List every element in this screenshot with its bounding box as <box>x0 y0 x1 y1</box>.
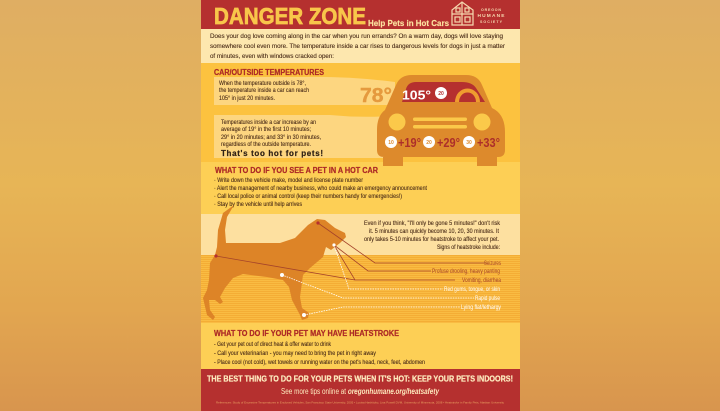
callout: too hot: That's too hot for pets! <box>221 149 323 158</box>
panel: car temperatures <box>214 67 505 166</box>
stat: +19: +19° <box>398 136 421 150</box>
logo: name <box>478 8 505 24</box>
panel: what to do if you see a pet in a hot car <box>214 165 427 208</box>
stat: 78 degrees: 78° <box>360 85 392 107</box>
stat: +33: +33° <box>477 136 500 150</box>
text block 1 <box>219 79 309 102</box>
footer link: See more tips online at oregonhumane.org/heatsafety <box>281 387 439 396</box>
stat: +33: 30 <box>466 140 472 146</box>
text block: Even if you think, "I'll only be gone 5 minutes!" don't risk <box>364 220 501 227</box>
panel: what to do if pet has heatstroke: - Get your pet out of direct heat & offer water to drink <box>214 341 332 348</box>
logo: house <box>452 2 473 25</box>
footer banner <box>201 369 520 411</box>
text block 2 <box>221 119 321 148</box>
sign labels: Vomiting, diarrhea <box>462 278 502 284</box>
text block 2: average of 19° in the first 10 minutes; <box>221 125 311 133</box>
callout band 1 <box>214 77 395 105</box>
intro text: Does your dog love coming along in the car when you run errands? On a warm day, dogs will love staying <box>210 33 503 40</box>
stat: 105 degrees: 105° <box>402 88 431 102</box>
text block: Signs of heatstroke include: <box>437 244 500 251</box>
sign labels: Profuse drooling, heavy panting <box>432 269 500 275</box>
panel: what to do if pet has heatstroke: - Call your veterinarian - you may need to bring the pet in right away <box>214 350 377 357</box>
stat: +33 <box>463 136 500 150</box>
heading: CAR/OUTSIDE TEMPERATURES <box>214 67 324 77</box>
footer headline: THE BEST THING TO DO FOR YOUR PETS WHEN IT'S HOT: KEEP YOUR PETS INDOORS! <box>207 374 513 384</box>
text block: it. 5 minutes can quickly become 10, 20, 30 minutes. It <box>369 228 499 235</box>
icon: car <box>377 75 505 166</box>
panel: what to do if pet has heatstroke <box>214 328 425 366</box>
logo: name: SOCIETY <box>480 20 503 24</box>
panel: what to do if pet has heatstroke: WHAT TO DO IF YOUR PET MAY HAVE HEATSTROKE <box>214 328 399 338</box>
logo: name: HUMANE <box>478 13 505 19</box>
text block 2: regardless of the outside temperature. <box>221 141 311 148</box>
sign lines <box>216 223 487 315</box>
illustration: dog <box>203 205 346 320</box>
references: References: Study of Excessive Temperatures in Enclosed Vehicles, San Francisco State University, 2005 • Louisa Hashitoko, Lisa Powell DVM, University of Minnesota, 2008 • Heatstroke in Family Pets, Alaskan University <box>216 400 504 404</box>
panel: what to do if you see a pet in a hot car: · Alert the management of nearby business, who could make an emergency announcement <box>214 185 427 192</box>
panel: what to do if you see a pet in a hot car: WHAT TO DO IF YOU SEE A PET IN A HOT CAR <box>215 165 379 175</box>
subtitle: Help Pets in Hot Cars <box>368 18 449 28</box>
markers <box>214 221 336 317</box>
intro text <box>201 29 520 63</box>
callout band 2 <box>214 115 390 158</box>
stat: +29 <box>423 136 460 150</box>
text block 1: 105° in just 20 minutes. <box>219 94 275 102</box>
panel: what to do if you see a pet in a hot car: · Call local police or animal control (keep their numbers handy for emergencies!) <box>214 193 402 200</box>
stat: +19 <box>385 136 421 150</box>
intro text: somewhere cool even more. The temperature inside a car rises to dangerous levels for dogs in just a matter <box>210 43 506 50</box>
stat: +29: 20 <box>426 140 432 146</box>
sign labels: Red gums, tongue, or skin <box>444 287 500 293</box>
title: DANGER ZONE <box>214 3 366 29</box>
sign labels: Lying flat/lethargy <box>461 305 501 311</box>
text block 1: When the temperature outside is 78°, <box>219 79 306 87</box>
sign labels: Rapid pulse <box>475 296 501 302</box>
text block 2: Temperatures inside a car increase by an <box>221 119 316 126</box>
poster <box>201 0 520 411</box>
panel: what to do if you see a pet in a hot car: · Write down the vehicle make, model and license plate number <box>214 177 364 184</box>
text block 2: 29° in 20 minutes; and 33° in 30 minutes, <box>221 133 321 141</box>
sign labels <box>432 261 502 311</box>
text block: only takes 5-10 minutes for heatstroke to affect your pet. <box>364 236 499 243</box>
intro text: of minutes, even with windows cracked open: <box>210 53 334 60</box>
icon: car: 20 <box>438 91 444 97</box>
header banner <box>201 0 520 29</box>
panel: what to do if you see a pet in a hot car: · Stay by the vehicle until help arrives <box>214 201 303 208</box>
text block <box>364 220 501 251</box>
stat: +19: 10 <box>388 140 394 146</box>
stat: +29: +29° <box>437 136 460 150</box>
panel: what to do if pet has heatstroke: - Place cool (not cold), wet towels or running water on the pet's head, neck, feet, abdomen <box>214 359 425 366</box>
logo: name: OREGON <box>481 8 501 12</box>
panel: heatstroke signs <box>201 205 520 323</box>
sign labels: Seizures <box>484 261 501 267</box>
text block 1: the temperature inside a car can reach <box>219 87 309 94</box>
